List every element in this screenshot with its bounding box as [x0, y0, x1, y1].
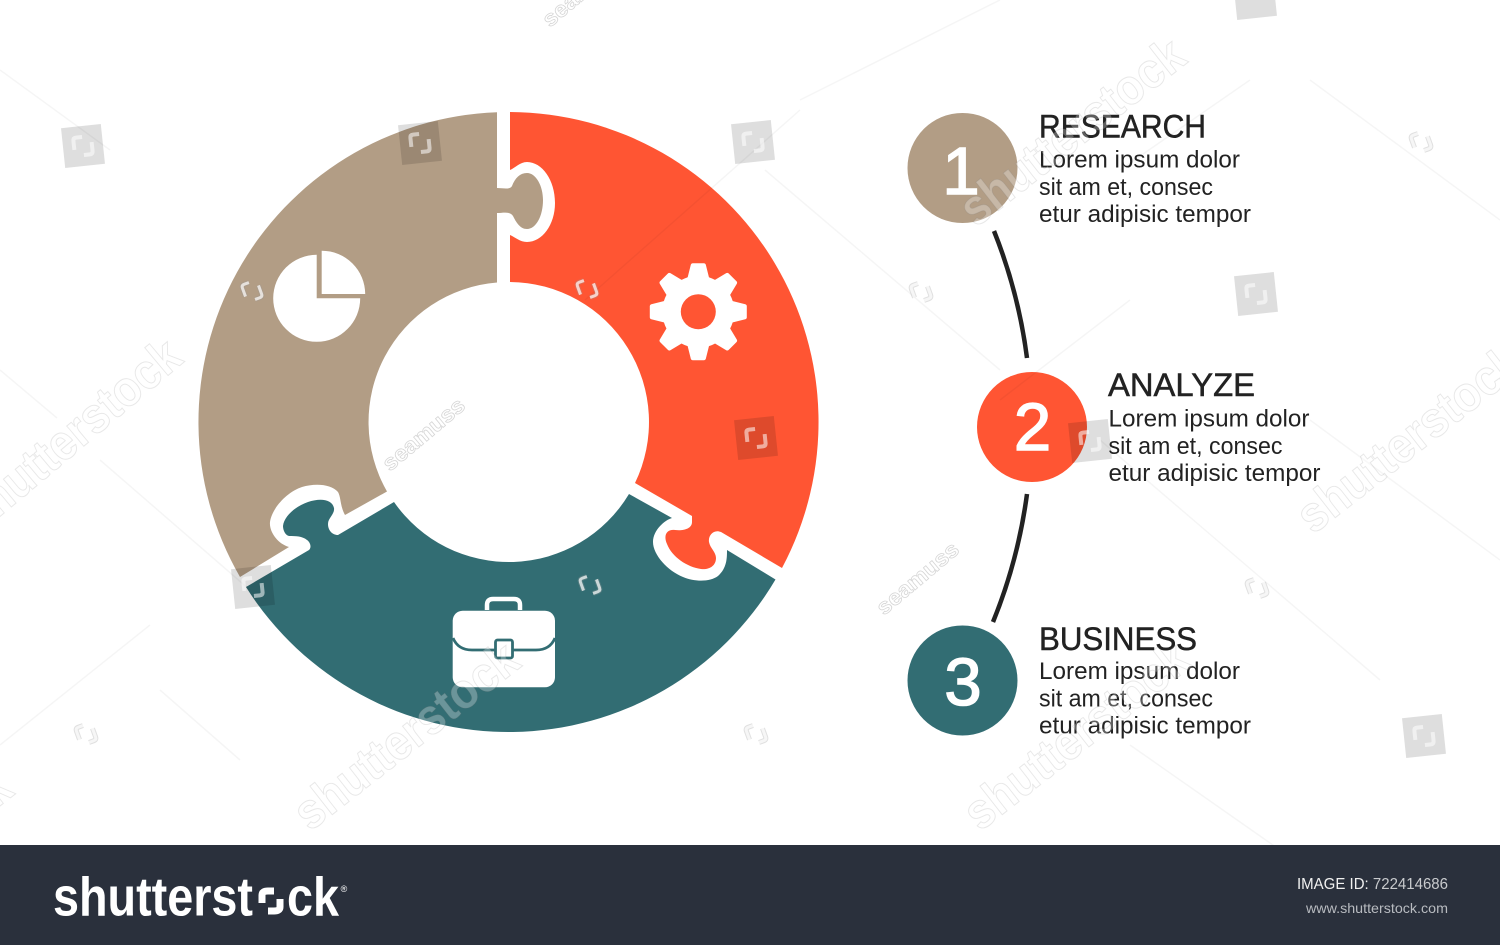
text block: business: sit am et, consec	[1039, 686, 1213, 713]
text block: research: sit am et, consec	[1039, 174, 1213, 201]
connector arc: step 1 to step 2	[994, 231, 1027, 358]
text block: analyze: sit am et, consec	[1108, 433, 1282, 460]
step 1 badge: 1	[942, 134, 980, 209]
footer bar	[0, 845, 1500, 945]
footer logo: ck	[287, 866, 339, 928]
text block: business: etur adipisic tempor	[1039, 712, 1251, 740]
icon: gear	[650, 263, 747, 360]
watermark overlay: seamuss	[377, 392, 470, 476]
icon: pie chart	[273, 251, 365, 342]
icon: briefcase	[453, 599, 555, 687]
puzzle ring chart	[198, 112, 819, 732]
text block: research: RESEARCH	[1039, 108, 1206, 144]
footer logo: shutterst	[53, 866, 253, 928]
step 1 badge	[908, 113, 1018, 223]
segment: brown research piece	[198, 112, 543, 577]
text block: analyze: etur adipisic tempor	[1108, 460, 1320, 487]
text block: research: Lorem ipsum dolor	[1039, 147, 1240, 174]
text block: analyze	[1108, 367, 1320, 487]
text block: analyze: ANALYZE	[1108, 367, 1255, 403]
text block: research: etur adipisic tempor	[1039, 201, 1251, 228]
text block: business: Lorem ipsum dolor	[1039, 658, 1240, 685]
step 3 badge: 3	[944, 645, 982, 720]
step 2 badge: 2	[1014, 390, 1051, 465]
image id: IMAGE ID: 722414686	[1297, 876, 1448, 893]
segment: red analyze piece	[510, 112, 819, 569]
step 2 badge	[977, 372, 1087, 482]
watermark overlay: shutterstock	[952, 630, 1200, 841]
segment: teal business piece	[246, 494, 776, 732]
text block: research	[1039, 108, 1251, 228]
watermark overlay: shutterstock	[282, 630, 530, 841]
watermark overlay: seamuss	[871, 536, 964, 620]
text block: business: BUSINESS	[1039, 621, 1197, 657]
text block: business	[1039, 621, 1251, 740]
watermark overlay: shutterstock	[948, 26, 1196, 237]
footer url: www.shutterstock.com	[1305, 900, 1448, 916]
step 3 badge	[908, 626, 1018, 736]
footer logo: ®	[341, 884, 348, 894]
connector arc: step 2 to step 3	[993, 494, 1027, 622]
text block: analyze: Lorem ipsum dolor	[1108, 406, 1310, 433]
